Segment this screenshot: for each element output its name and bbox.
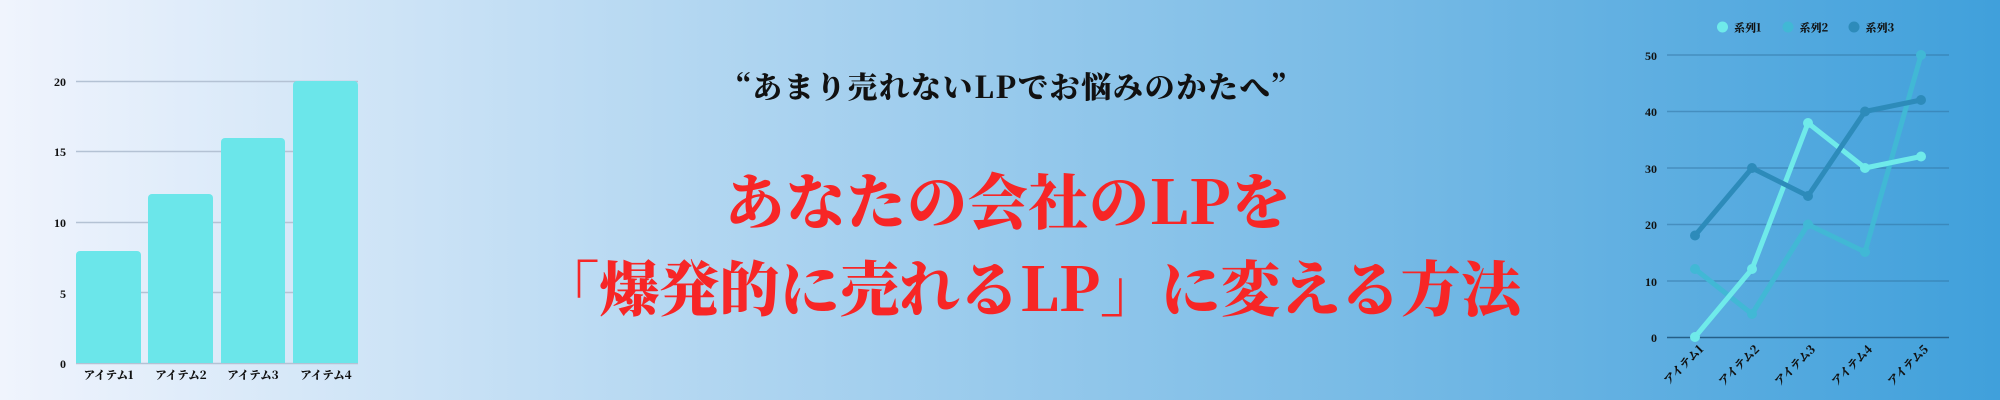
bar chart y axis labels: 0 (60, 357, 66, 371)
line chart x axis labels: アイテム4 (1828, 342, 1876, 389)
line chart y axis labels: 50 (1645, 49, 1657, 63)
heading line 1: あなたの会社のLPを (725, 156, 1291, 242)
heading line 2: 「爆発的に売れるLP」に変える方法 (539, 243, 1528, 329)
line chart x axis labels: アイテム3 (1771, 342, 1819, 389)
line chart y axis labels: 0 (1651, 331, 1657, 345)
line chart legend: 系列3 (1866, 20, 1894, 36)
series 3 line (1690, 95, 1926, 240)
bar chart y axis labels: 20 (54, 75, 66, 89)
bar chart y axis labels: 5 (60, 287, 66, 301)
bar chart y axis labels: 10 (54, 216, 66, 230)
line chart y axis labels (1645, 49, 1657, 345)
line chart x axis labels: アイテム2 (1715, 342, 1763, 389)
bar chart x axis labels: アイテム2 (155, 367, 207, 383)
line chart x axis labels: アイテム1 (1660, 342, 1707, 388)
bar chart y axis labels: 15 (54, 145, 66, 159)
main heading (539, 156, 1528, 329)
line chart y axis labels: 40 (1645, 105, 1657, 119)
bars (76, 81, 358, 363)
line chart y axis labels: 10 (1645, 275, 1657, 289)
subheading: “あまり売れないLPでお悩みのかたへ” (735, 63, 1287, 107)
bar chart x axis labels: アイテム3 (227, 367, 279, 383)
line chart x axis labels (1660, 342, 1932, 389)
line chart (1645, 20, 1949, 389)
bar chart x axis labels (84, 367, 352, 383)
line chart x axis labels: アイテム5 (1884, 342, 1932, 389)
line chart legend (1717, 20, 1894, 36)
bar chart y axis labels (54, 75, 66, 371)
line chart legend: 系列1 (1734, 20, 1761, 36)
line chart legend: 系列2 (1800, 20, 1828, 36)
bar chart x axis labels: アイテム4 (300, 367, 352, 383)
series 2 line (1690, 50, 1926, 319)
line chart y axis labels: 20 (1645, 218, 1657, 232)
bar chart x axis labels: アイテム1 (84, 367, 133, 383)
line chart y axis labels: 30 (1645, 162, 1657, 176)
bar chart (54, 75, 358, 383)
series 1 line (1690, 118, 1926, 342)
